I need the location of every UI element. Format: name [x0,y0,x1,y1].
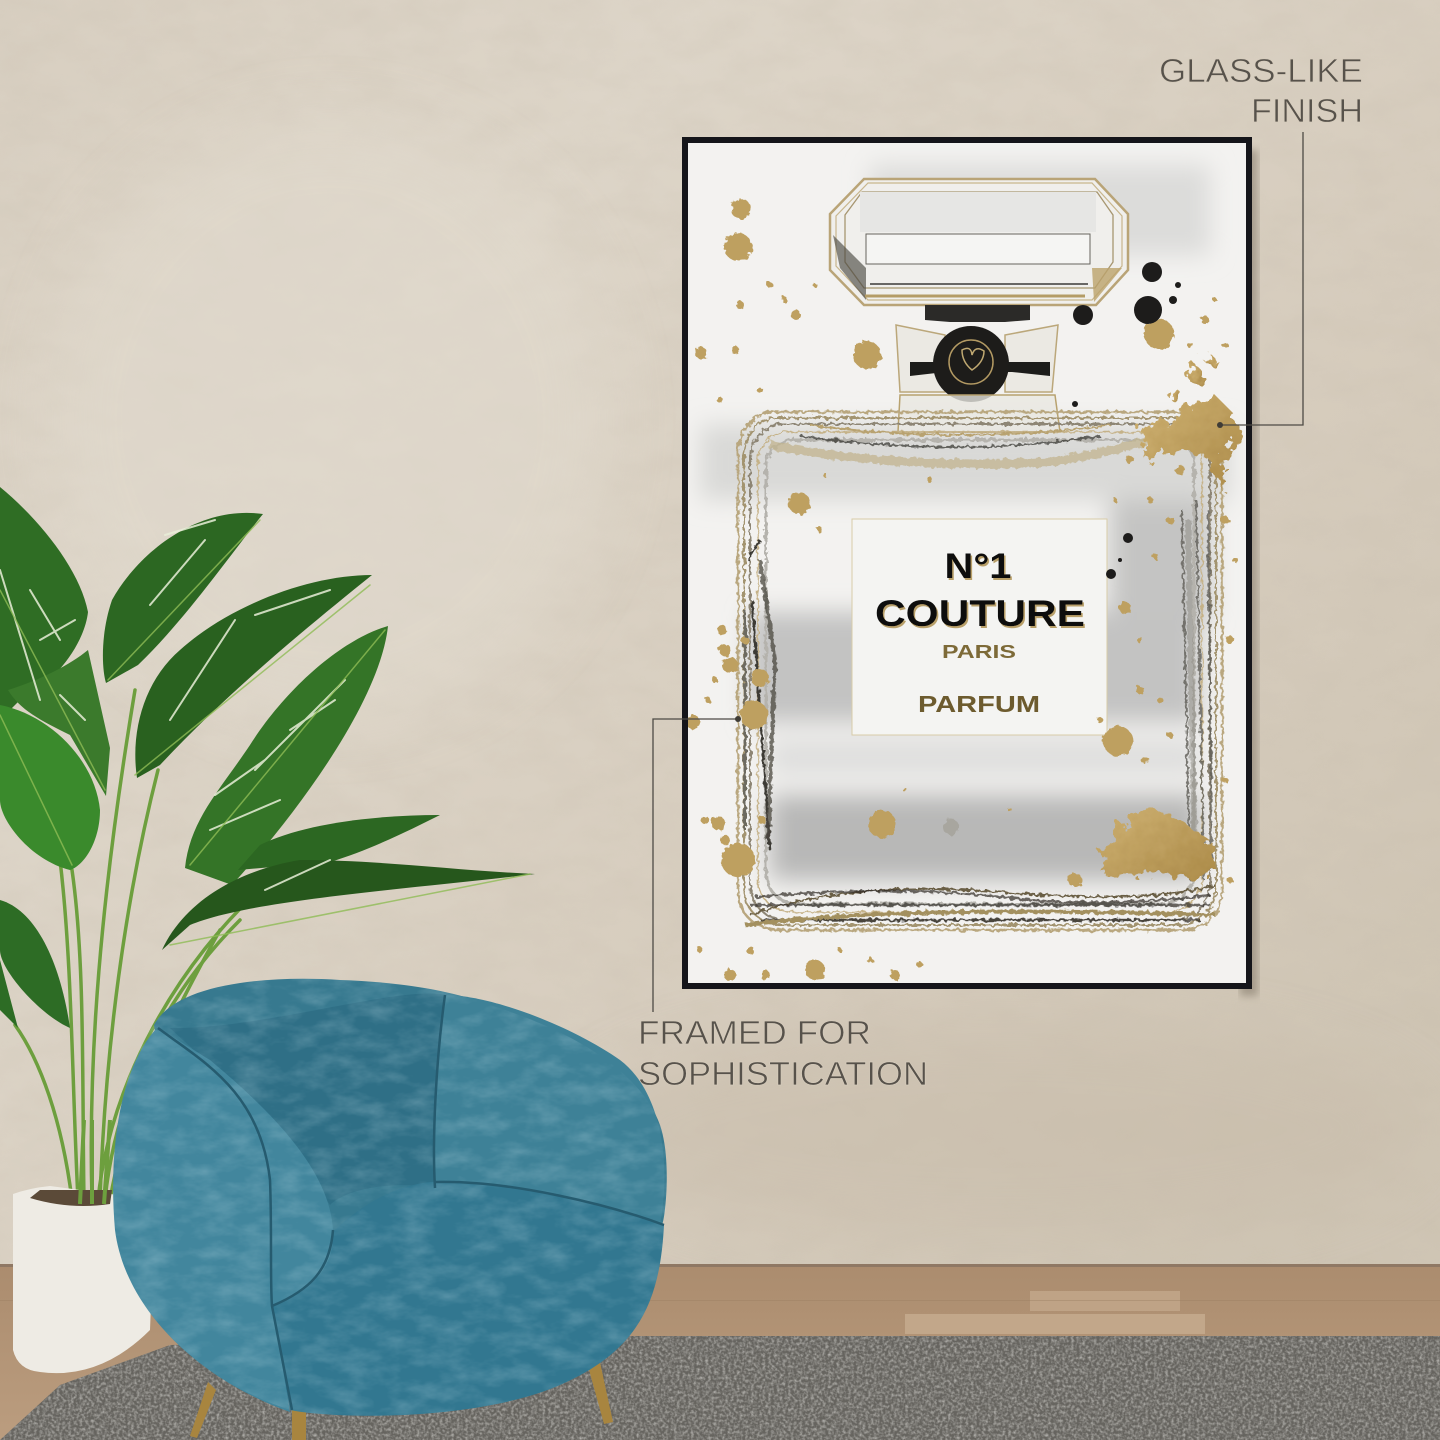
bottle label: PARFUM [918,691,1040,717]
chair seat [270,1182,664,1416]
potted plant [0,487,535,1373]
chair arm [113,1030,333,1412]
bottle label [852,519,1107,735]
bottle label: PARIS [942,642,1016,662]
chair seams [158,995,664,1410]
leaves [0,487,535,1028]
chair legs [190,1382,216,1438]
grey rug [0,1336,1440,1440]
bottle neck [896,305,1060,432]
callout: framed for sophistication: FRAMED FOR [638,1014,871,1051]
chair back [154,979,667,1300]
callout: framed for sophistication: SOPHISTICATION [638,1055,928,1092]
gold paint patches [1100,355,1240,880]
plant pot [13,1186,155,1373]
frame shadow [1240,150,1258,996]
bottle label: COUTURE [875,593,1085,634]
bottle label: N°1 [944,547,1012,586]
blue velvet armchair [113,979,667,1440]
leaf veins and stripes [0,520,530,945]
callout: glass-like finish: FINISH [1251,92,1363,129]
canvas [688,143,1246,983]
gold and black paint splatter [686,199,1238,981]
watercolor wash [700,165,1230,880]
black frame [682,137,1252,989]
callout: glass-like finish [1159,52,1363,428]
chair inner [170,994,445,1205]
bottle body [738,412,1222,930]
plant stems [15,690,265,1200]
framed artwork [682,137,1258,996]
callout: glass-like finish: GLASS-LIKE [1159,52,1363,89]
wood floor [0,1264,1440,1440]
callout: framed for sophistication [638,716,928,1092]
perfume stopper [830,179,1128,305]
velvet texture [113,979,667,1416]
